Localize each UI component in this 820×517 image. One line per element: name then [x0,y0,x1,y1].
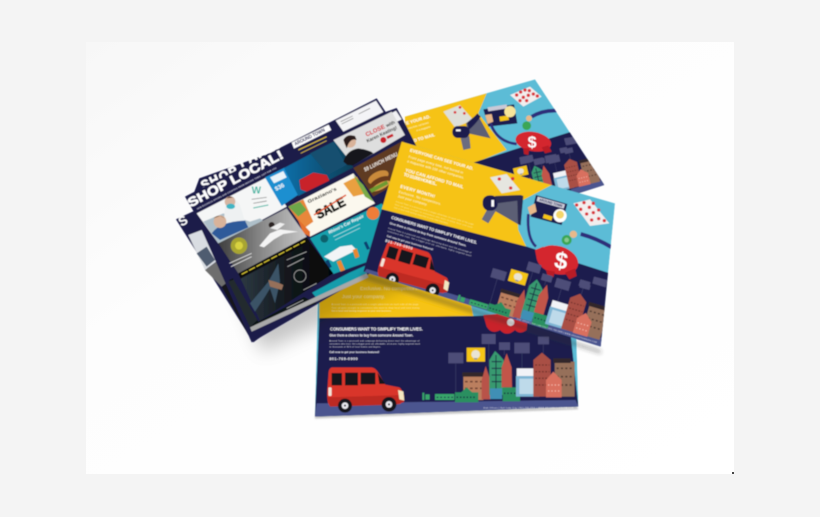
card text [366,114,436,153]
card text: Around Town is a postcard with a single advertiser on each side of the page. [332,303,419,306]
ad: car repair [310,203,410,274]
bottom sheet: S [176,213,190,229]
ad: sale [288,173,375,237]
ad: lunch menu: $9 LUNCH MENU [363,152,399,174]
ad: dentist [197,177,287,243]
card text: Around Town is a postcard and campaign delivering direct mail the advantage of [329,340,420,343]
card text: Utah Offices | Salt Lake City | 801-769-0900 | WWW.AROUNDTOWNUSA.COM [483,406,574,409]
card text: CONSUMERS WANT TO SIMPLIFY THEIR LIVES. [391,215,478,245]
postcard: bottom flat card [314,273,579,420]
card text: Your ad goes straight to consumers who want to shop local and save money. [332,306,420,309]
city illustration [510,147,601,190]
card text: 801-769-0900 [329,357,358,361]
card text: EVERYONE CAN SEE YOUR AD. [409,147,474,171]
card text: Front page every time, not buried [395,121,430,134]
stack shadow [215,180,440,352]
heading: Shop Local: SHOP LOCAL! [186,148,286,210]
green coin [522,121,531,130]
card text: Exclusive. No competitors. [360,286,419,292]
white photo backdrop [86,42,734,474]
card text: Front page every time, not buried in [408,155,464,175]
front sheet [185,98,454,322]
card text: 801-769-0900 [385,239,413,251]
card text: to thousands of 80% of local homes and buyers. [329,346,381,349]
ad: realtor [333,112,406,167]
front card shadow [360,272,601,354]
card text: Around Town is a postcard and campaign delivering direct mail the advantage of [388,227,472,254]
extra signs [579,277,607,290]
road strip [315,400,578,417]
ad: blue coupon [265,167,299,206]
ad: lunch menu [353,141,422,197]
tablet [483,104,517,127]
card text: Give them a chance to buy from someone Around Town. [389,221,467,248]
map with pins [443,105,473,127]
ad: sale: Graziano's [307,186,338,204]
ad: sale: SALE [313,194,348,222]
road strip [571,180,604,195]
card text: CONSUMERS WANT TO SIMPLIFY THEIR LIVES. [330,326,423,331]
piggy bank remnant [483,312,528,334]
card text [329,286,574,409]
city illustration [456,261,606,340]
postcard: front card [363,142,615,347]
card text: Give them a chance to buy from someone Around Town. [329,334,413,338]
card text: EVERY MONTH! [400,184,436,199]
card text: Utah Offices | Salt Lake City | 801-769-0900 | WWW.AROUNDTOWNUSA.COM [516,317,598,344]
ad: car repair: Rhino's Car Repair [328,213,365,235]
card text: in a magazine [416,126,432,132]
logo: Around Town: AROUND TOWN [294,127,326,147]
subheading: NEW BUSINESS OFFERS AND COUPONS FROM AROUND TOWN JUST FOR YOU [196,166,278,211]
card text: Your ad goes straight to consumers who want to shop local and save. [394,203,474,229]
middle sheet [190,108,437,342]
tablet [528,195,567,225]
card text: Just your company. [397,194,428,207]
card text: Get a local and lasting response to your new business. [394,206,449,225]
red car [327,367,404,413]
piggy bank [534,244,579,280]
card text: YOU CAN AFFORD TO MAIL [379,132,436,153]
piggy bank [514,129,553,155]
city illustration [422,334,575,402]
ad: yoga dancer [241,242,333,321]
middle sheet: SHOP LOCAL [199,141,289,193]
ad: blue coupon: $36 [274,183,286,193]
card text: YOU CAN AFFORD TO MAIL [405,167,465,190]
card text: consumers who trust. Get a bigger print ad, affordable, highly targeted reach [387,230,472,257]
red map of pins [510,87,542,107]
card text: Around Town is a postcard with a single advertiser on each side of the page. [395,200,475,226]
card text: consumers who trust. Get a bigger print ad, affordable, all-in-one, highly targeted reach [329,343,420,346]
card text: Call now to get your business featured! [386,235,434,251]
yellow strip [238,237,310,279]
postcard stack: Shop Local [176,98,454,342]
piggy bank: $ [552,247,570,275]
hand arc [528,214,536,247]
bottom sheet [176,207,270,342]
card text: EVERYONE CAN SEE YOUR AD. [366,114,431,137]
ad: realtor: CLOSE with [365,120,396,138]
tablet: AROUND TOWN [539,198,563,208]
card text: Call now to get your business featured! [329,350,379,354]
card text [385,147,598,344]
ad: dentist: W [252,185,262,196]
megaphone [452,113,491,150]
arm and arc [491,123,517,144]
ad: realtor: Karen Keating! [366,125,398,144]
arm and coin [581,234,612,247]
piggy bank: $ [528,134,537,151]
ad: red car wash [284,140,353,196]
ad: grey karate [218,208,307,273]
map with pins [490,174,520,193]
megaphone [482,195,523,225]
card text: TO 10,000 HOMES... [403,172,438,187]
card text: Just your company. [342,294,385,300]
postcard: top right card [404,79,605,194]
grey signs [519,137,577,165]
card text: Get a local and lasting response to your new business. [332,309,392,312]
red car [377,240,450,296]
card text: a magazine with 150 other companies. [407,159,465,180]
card text: Exclusive. No competitors. [398,190,442,206]
red pin map [573,199,609,226]
road strip [363,269,603,347]
address box [336,101,383,132]
